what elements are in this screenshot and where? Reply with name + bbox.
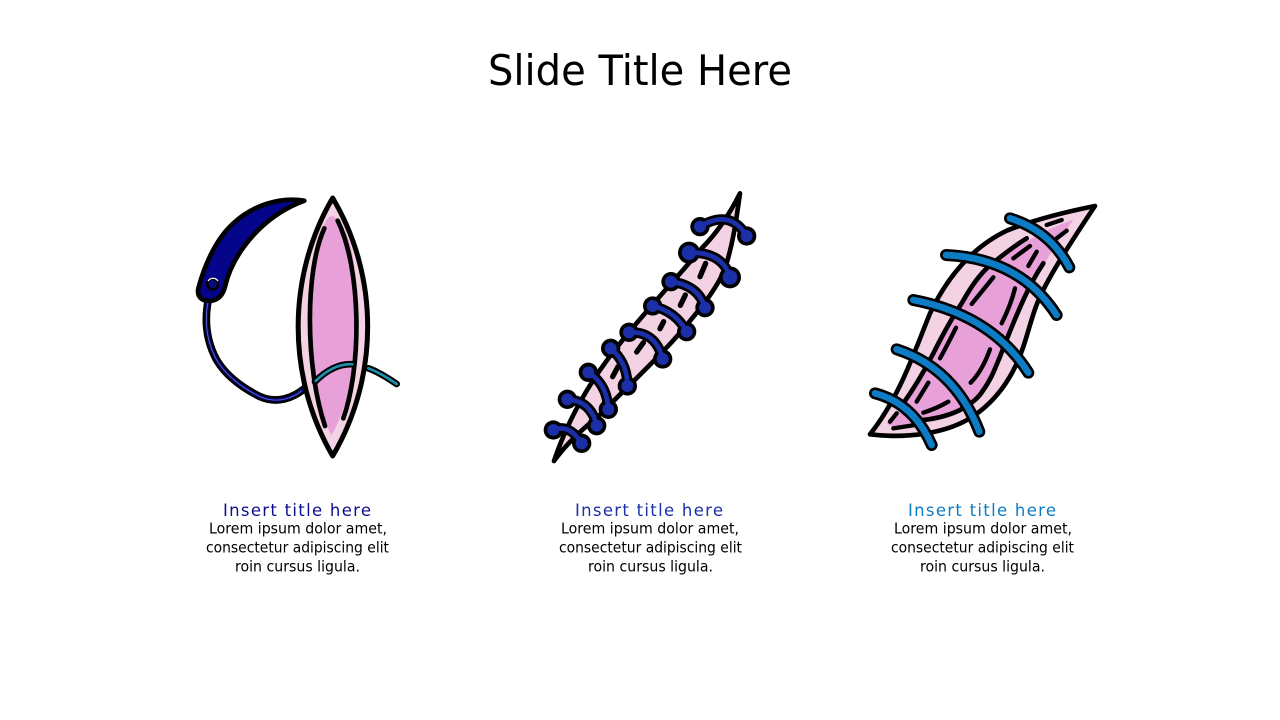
wound outer [870,206,1095,436]
column 2 heading: Insert title here [575,501,723,520]
column 3 body: consectetur adipiscing elit [891,538,1074,556]
icon: needle and thread through a wound [198,198,397,456]
wound dashes [890,220,1067,428]
column 2 body: Lorem ipsum dolor amet, [561,520,739,538]
column 2 body: roin cursus ligula. [588,558,713,576]
column 2 body [559,520,742,576]
icon: wound with sutures [870,206,1095,445]
column 1 body: consectetur adipiscing elit [206,538,389,556]
column 3 heading: Insert title here [908,501,1056,520]
column 1 body [206,520,389,576]
title: Slide Title Here [488,46,792,95]
column 3 body: Lorem ipsum dolor amet, [894,520,1072,538]
suture outlines [875,218,1069,445]
text block: column 2 [559,501,742,576]
staples fill [547,219,753,449]
column 2 body: consectetur adipiscing elit [559,538,742,556]
text block: column 3 [891,501,1074,576]
column 1 body: Lorem ipsum dolor amet, [209,520,387,538]
wound inner [887,220,1073,427]
needle eye [207,279,218,289]
column 3 body [891,520,1074,576]
column 1 heading: Insert title here [223,501,371,520]
text block: column 1 [206,501,389,576]
curved needle [198,200,304,301]
wound dashes [613,263,706,377]
wound lens outer [298,198,368,456]
column 3 body: roin cursus ligula. [920,558,1045,576]
wound inner [310,216,357,435]
needle thread [206,290,306,400]
staples outline [544,217,756,453]
wound inner edges [903,238,1043,420]
suture fills [875,218,1069,445]
wound inner edges [310,221,356,426]
teal thread [315,364,397,384]
icon: stapled wound [544,193,756,461]
wound strip [554,193,740,461]
column 1 body: roin cursus ligula. [235,558,360,576]
